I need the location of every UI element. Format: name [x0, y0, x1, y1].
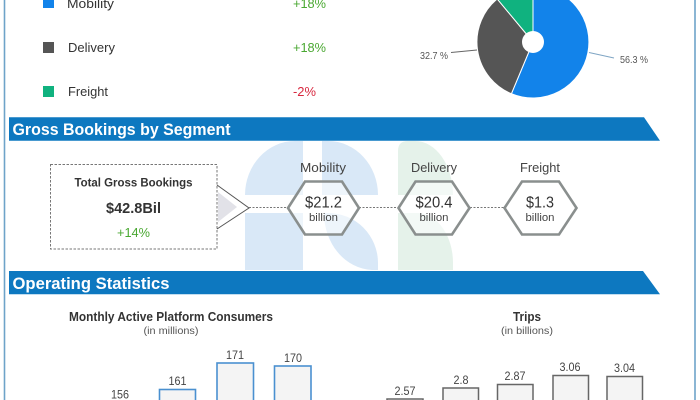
arrow: total to segments: [217, 185, 504, 229]
segment: Mobility: [288, 160, 359, 234]
bar chart: Monthly Active Platform Consumers: [69, 310, 311, 400]
panel: total gross bookings: [50, 164, 217, 249]
background watermark logo: [245, 141, 453, 270]
heading: Operating Statistics: [9, 271, 660, 294]
bar chart: Trips: 2.8: [454, 375, 468, 387]
bar chart: Monthly Active Platform Consumers: 161: [168, 376, 186, 388]
panel: segment growth legend: [43, 0, 326, 99]
bar chart: Monthly Active Platform Consumers: (in millions): [144, 325, 198, 337]
segment: Delivery: [398, 160, 470, 234]
legend row: Freight: -2%: [293, 84, 316, 99]
segment: Freight: $1.3: [526, 194, 554, 212]
bar chart: Trips: (in billions): [501, 325, 553, 337]
bar chart: Trips: Trips: [513, 310, 541, 324]
bar chart: Trips: 2.57: [394, 386, 416, 398]
legend row: Freight: Freight: [68, 84, 108, 99]
heading: Operating Statistics: Operating Statistics: [12, 275, 170, 293]
bar chart: Trips: [387, 310, 642, 400]
bar chart: Monthly Active Platform Consumers: 171: [226, 350, 244, 362]
pie chart: segment share: 32.7 %: [420, 50, 448, 62]
segment: Freight: billion: [526, 212, 554, 224]
panel: total gross bookings: Total Gross Bookings: [74, 176, 193, 190]
bar chart: Monthly Active Platform Consumers: Monthly Active Platform Consumers: [69, 310, 273, 324]
legend row: Delivery: +18%: [293, 40, 326, 55]
legend row: Delivery: Delivery: [68, 40, 115, 55]
segment: Delivery: billion: [420, 212, 448, 224]
segment: Delivery: Delivery: [411, 160, 457, 175]
segment: Mobility: $21.2: [305, 194, 342, 212]
panel: total gross bookings: +14%: [117, 225, 150, 240]
segment: Freight: [504, 160, 576, 234]
panel: total gross bookings: $42.8Bil: [106, 200, 161, 217]
heading: Gross Bookings by Segment: [9, 117, 660, 141]
segment: Freight: Freight: [520, 160, 560, 175]
segment: Delivery: $20.4: [416, 194, 453, 212]
segment: Mobility: billion: [309, 212, 338, 224]
pie chart: segment share: 56.3 %: [620, 54, 648, 66]
bar chart: Trips: 2.87: [504, 371, 526, 383]
legend row: Mobility: [43, 0, 326, 11]
legend row: Freight: [43, 84, 316, 99]
bar chart: Trips: 3.04: [614, 363, 636, 375]
bar chart: Trips: 3.06: [560, 362, 580, 374]
bar chart: Monthly Active Platform Consumers: 170: [284, 353, 302, 365]
legend row: Delivery: [43, 40, 326, 55]
pie chart: segment share: [420, 0, 648, 98]
heading: Gross Bookings by Segment: Gross Bookings by Segment: [12, 121, 231, 139]
segment: Mobility: Mobility: [300, 160, 347, 175]
